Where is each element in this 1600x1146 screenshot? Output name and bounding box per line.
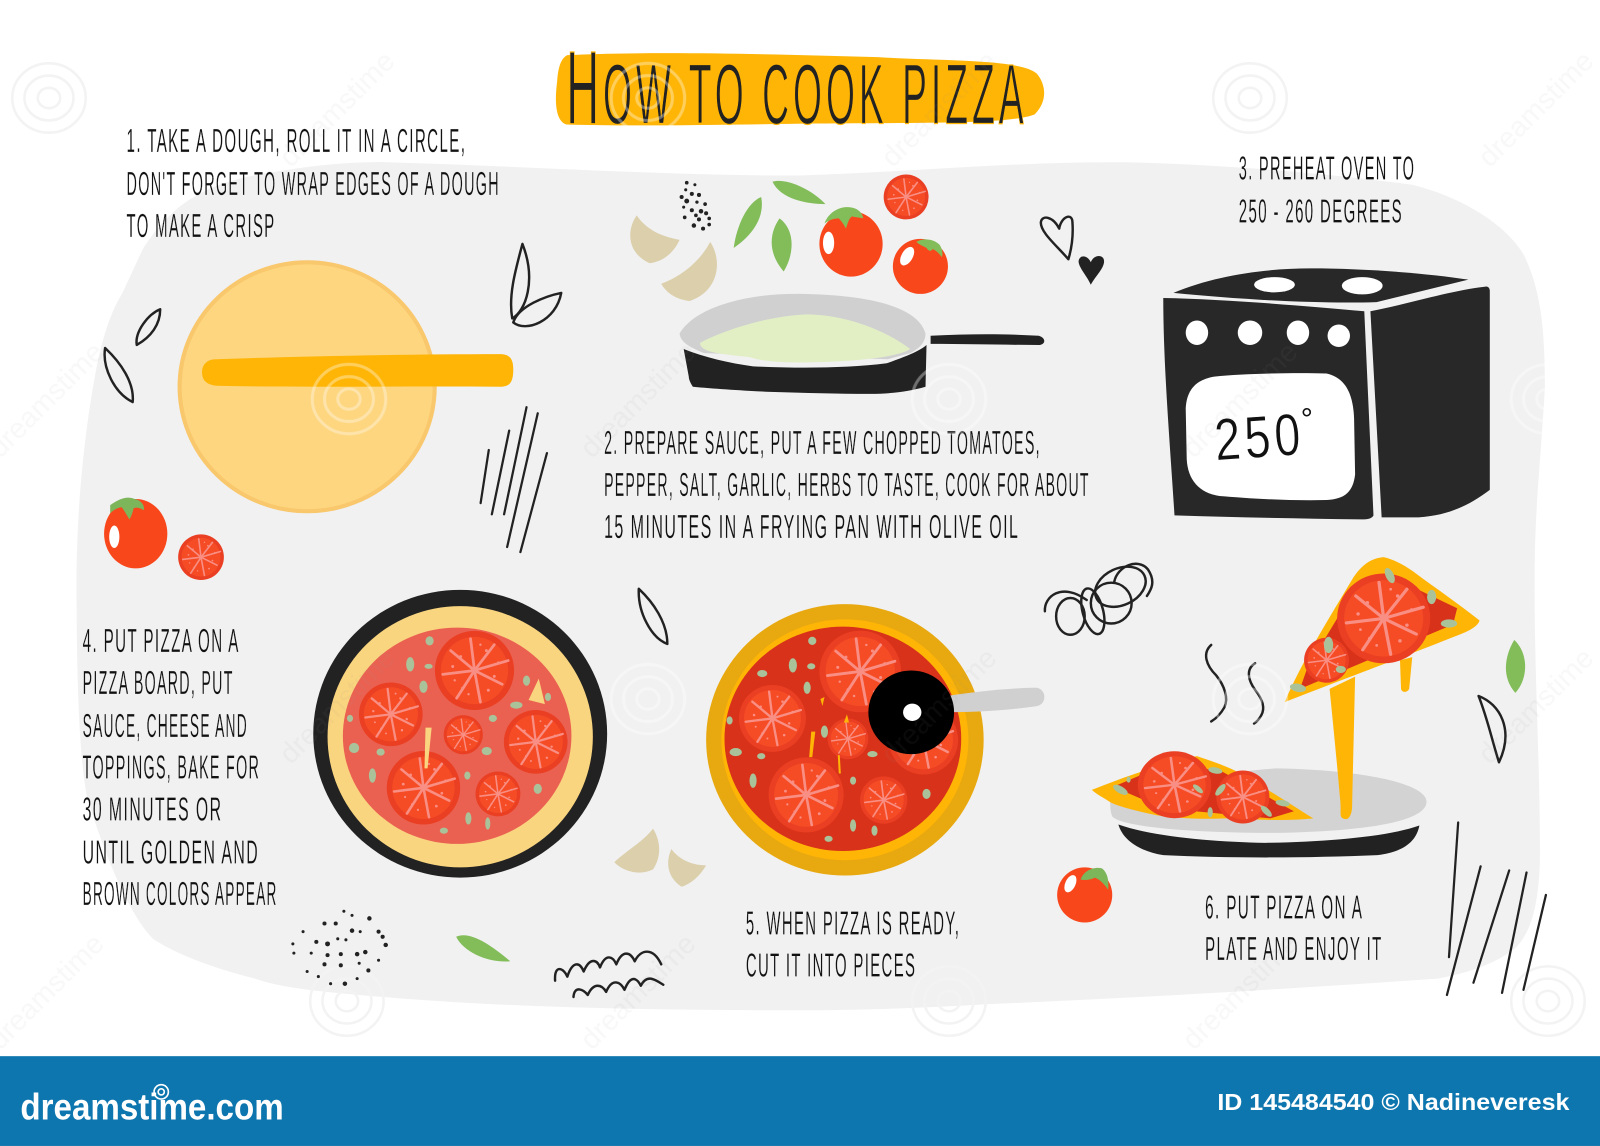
- cheese bits: [809, 697, 849, 774]
- squiggles: [555, 952, 663, 997]
- footer bar: [0, 1056, 1600, 1146]
- tomato slice: [884, 175, 929, 219]
- sauce: [343, 628, 571, 844]
- herbs: [347, 636, 551, 834]
- outline heart: [1041, 217, 1073, 259]
- step 1 text: [127, 123, 500, 245]
- step 2 illustration: falling ingredients: [630, 175, 948, 301]
- watermark captions: dreamstime: [1472, 45, 1600, 173]
- tomato: [893, 239, 948, 294]
- infographic canvas: DON'T FORGET TO WRAP EDGES OF A DOUGH: [127, 166, 500, 203]
- step 5 illustration: baked pizza with cutter: [706, 604, 1044, 876]
- step 6 text: [1205, 889, 1383, 968]
- image credit: ID 145484540 © Nadineveresk: [1217, 1089, 1570, 1115]
- tomato left: [104, 498, 167, 568]
- motion lines near dough: [481, 407, 547, 552]
- step 5 text: CUT IT INTO PIECES: [746, 948, 916, 985]
- crust: [328, 606, 593, 867]
- infographic canvas: 250 - 260 DEGREES: [1239, 193, 1403, 230]
- infographic canvas: SAUCE, CHEESE AND: [83, 708, 248, 745]
- oven side: [1370, 287, 1490, 517]
- watermark captions: dreamstime: [875, 45, 1003, 173]
- tomato bottom: [1057, 867, 1112, 922]
- flat slice herbs: [1112, 766, 1290, 818]
- oven temperature: 250: [1212, 400, 1307, 473]
- garlic cloves: [630, 215, 680, 263]
- oven: [1163, 268, 1490, 519]
- infographic canvas: PLATE AND ENJOY IT: [1205, 931, 1383, 968]
- step 4 text: 30 MINUTES OR: [83, 791, 222, 828]
- basil leaves: [734, 197, 762, 248]
- filled heart: [1079, 256, 1104, 285]
- infographic canvas: 5. WHEN PIZZA IS READY,: [746, 906, 960, 943]
- tomato slice left: [178, 534, 224, 580]
- sauce: [700, 314, 910, 363]
- step 4 illustration: raw pizza on board: [313, 590, 607, 878]
- basil leaf right: [1506, 640, 1525, 693]
- logo text: dreamstime.com: [20, 1086, 284, 1127]
- oven front: [1163, 298, 1373, 519]
- basil leaf bottom: [456, 935, 510, 962]
- step 4 text: UNTIL GOLDEN AND: [83, 834, 259, 871]
- tomato: [819, 207, 883, 277]
- watermark captions: dreamstime: [1176, 336, 1304, 464]
- cutter hub: [903, 704, 921, 721]
- dough: [180, 262, 435, 511]
- pan rim: [680, 294, 926, 359]
- step 4 text: [83, 623, 278, 913]
- oven window: [1186, 373, 1355, 500]
- garlic cloves bottom: [614, 829, 706, 887]
- spiral scribble: [1045, 559, 1152, 637]
- title banner: [556, 31, 1044, 147]
- cheese bits: [424, 679, 545, 768]
- step 5 text: [746, 906, 960, 985]
- watermark captions: dreamstime: [1176, 928, 1304, 1056]
- step 6 text: 6. PUT PIZZA ON A: [1205, 889, 1363, 926]
- herbs: [727, 637, 931, 842]
- watermark captions: dreamstime: [574, 928, 702, 1056]
- knobs: [1186, 320, 1350, 347]
- oven top: [1173, 268, 1468, 303]
- flat slice crust: [1092, 756, 1313, 820]
- pan handle: [931, 334, 1044, 345]
- burners: [1254, 277, 1295, 292]
- watermark captions: dreamstime: [1472, 642, 1600, 770]
- background blob: [77, 162, 1545, 1010]
- step 2 text: 15 MINUTES IN A FRYING PAN WITH OLIVE OIL: [604, 509, 1019, 546]
- outline leaves near dough: [105, 244, 561, 402]
- watermark spirals: [312, 63, 1585, 734]
- step 1 illustration: dough and rolling pin: [180, 262, 513, 511]
- cutter wheel: [868, 670, 954, 754]
- steam: [1206, 645, 1263, 724]
- infographic canvas: TOPPINGS, BAKE FOR: [83, 750, 260, 787]
- lifted slice crust: [1285, 557, 1480, 702]
- infographic canvas: BROWN COLORS APPEAR: [83, 876, 278, 913]
- tomato slices: [739, 631, 958, 832]
- lifted slice sauce: [1300, 575, 1457, 689]
- rolling pin: [202, 354, 513, 387]
- outline leaf right: [1479, 696, 1505, 762]
- lifted slice herbs: [1289, 566, 1457, 693]
- pepper dots bottom: [291, 910, 388, 986]
- watermark captions: dreamstime: [273, 642, 401, 770]
- pizza board: [313, 590, 607, 878]
- frying pan: [680, 294, 1044, 394]
- plate base: [1118, 825, 1419, 857]
- step 4 text: PIZZA BOARD, PUT: [83, 665, 234, 702]
- crust: [706, 604, 984, 876]
- cheese drips: [1330, 677, 1355, 819]
- outline leaf: [639, 589, 667, 644]
- flat slice sauce: [1113, 768, 1294, 818]
- oven temperature: °: [1300, 402, 1315, 437]
- plate top: [1110, 768, 1427, 833]
- flat slice tomatoes: [1138, 751, 1269, 824]
- step 3 text: [1239, 151, 1415, 230]
- logo spiral: [154, 1085, 168, 1099]
- step 2 text: [604, 425, 1090, 546]
- watermark captions: dreamstime: [875, 642, 1003, 770]
- hearts: [1041, 217, 1104, 285]
- cutter handle: [947, 688, 1044, 712]
- sauce: [724, 627, 961, 851]
- pan body: [684, 345, 927, 394]
- watermark captions: dreamstime: [574, 336, 702, 464]
- infographic canvas: 1. TAKE A DOUGH, ROLL IT IN A CIRCLE,: [127, 123, 466, 160]
- pepper grains: [680, 181, 711, 231]
- infographic canvas: HOW TO COOK PIZZA: [566, 31, 1028, 147]
- step 1 text: TO MAKE A CRISP: [127, 208, 276, 245]
- watermark captions: dreamstime: [273, 45, 401, 173]
- step 6 illustration: plate and pizza slices: [1092, 557, 1480, 857]
- tomato slices: [359, 631, 568, 825]
- lifted slice tomatoes: [1304, 574, 1430, 683]
- motion lines bottom right: [1447, 822, 1546, 995]
- title highlight: [556, 53, 1044, 125]
- step 4 text: 4. PUT PIZZA ON A: [83, 623, 240, 660]
